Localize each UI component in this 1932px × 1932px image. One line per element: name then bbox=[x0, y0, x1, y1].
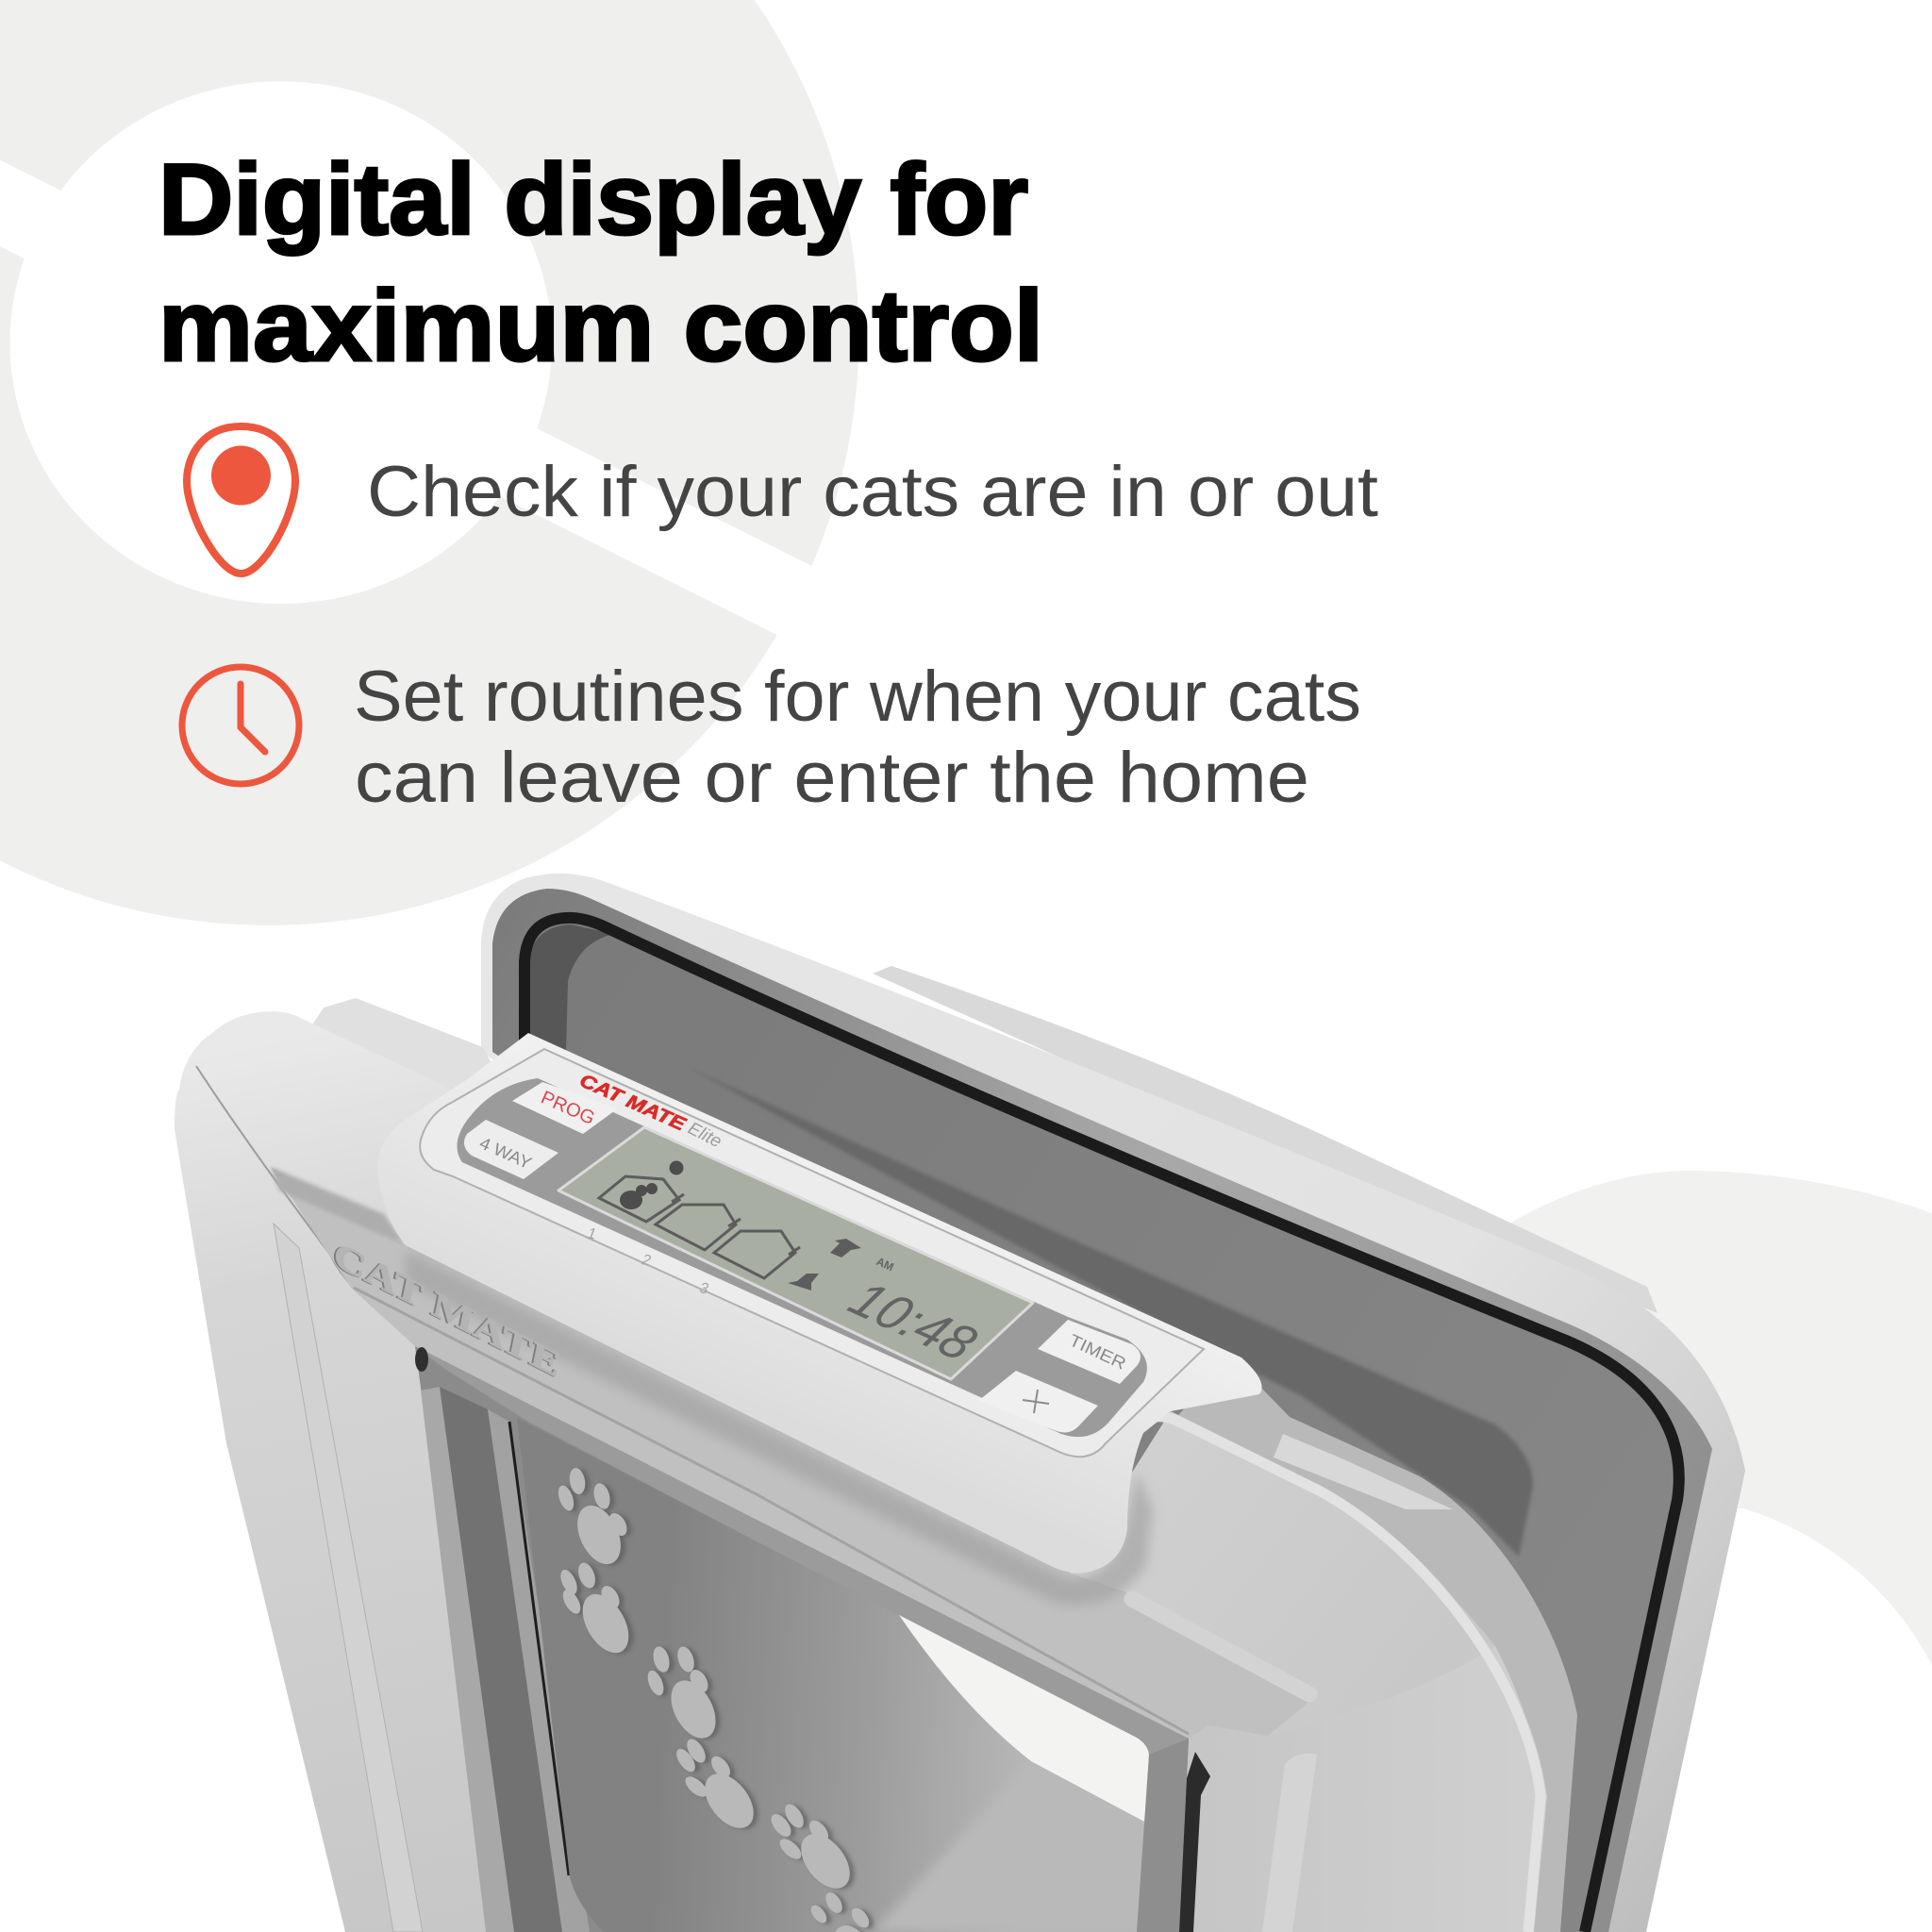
window recess bbox=[415, 1346, 1189, 1932]
lcd arrow up bbox=[830, 1239, 861, 1257]
plus glyph bbox=[1023, 1390, 1049, 1413]
window top lip bbox=[415, 1346, 1189, 1755]
embossed brand text bbox=[328, 1235, 564, 1386]
button plus bbox=[978, 1371, 1098, 1432]
frame shadow wedge bbox=[271, 1167, 406, 1245]
handle shadow bbox=[406, 1250, 1153, 1606]
rear frame rim bbox=[481, 874, 1745, 1932]
rear inner recess bbox=[686, 1066, 1533, 1557]
text: routines bbox=[354, 657, 1361, 818]
flap panel bbox=[517, 1418, 1146, 1932]
text: in or out: Check if your cats are in or out bbox=[367, 452, 1378, 532]
rear throat bbox=[1171, 1373, 1577, 1932]
frame top rib bbox=[1132, 1599, 1309, 1694]
display faceplate bbox=[420, 1049, 1204, 1457]
panel labels: PROG bbox=[538, 1087, 598, 1129]
embossed brand text: CAT MATE bbox=[330, 1235, 564, 1386]
panel labels bbox=[476, 1070, 1129, 1374]
rear left dark lip bbox=[528, 924, 613, 1052]
front frame bbox=[175, 1011, 1547, 1932]
button prog bbox=[512, 1082, 618, 1134]
window opening bbox=[899, 1615, 1149, 1823]
lcd icon: bell bbox=[670, 1160, 683, 1175]
title: maximum control bbox=[158, 269, 1043, 382]
window channel bbox=[440, 1387, 562, 1932]
frame lower right face bbox=[1179, 1646, 1547, 1932]
background logo shape: top left bbox=[0, 0, 937, 925]
product: cat flap bbox=[175, 874, 1745, 1932]
panel labels: TIMER bbox=[1066, 1330, 1129, 1374]
frame ridge line bbox=[354, 1288, 1189, 1734]
front frame right rim bbox=[1132, 1417, 1541, 1932]
lcd screen bbox=[558, 1127, 1033, 1379]
background logo shape: bottom right bbox=[1321, 1171, 1932, 1665]
rear black gasket bbox=[525, 918, 1679, 1932]
frame seam bbox=[196, 1066, 354, 1288]
lcd icon: cats bbox=[620, 1183, 658, 1209]
rear frame grey band bbox=[492, 889, 1712, 1932]
screw hole bbox=[415, 1347, 428, 1372]
paw prints bbox=[556, 1467, 873, 1932]
window right slit bbox=[1179, 1752, 1210, 1932]
display housing bbox=[377, 1033, 1262, 1574]
frame lower right rib bbox=[1262, 1754, 1317, 1932]
icon: clock bbox=[182, 667, 299, 784]
window rail 1 bbox=[421, 1387, 514, 1932]
embossed brand text: CAT MATE bbox=[328, 1235, 562, 1386]
front frame back tab bbox=[311, 998, 491, 1099]
lcd arrow down bbox=[788, 1274, 819, 1291]
rear throat highlight bbox=[1274, 1434, 1453, 1509]
frame right corner bbox=[943, 1411, 1495, 1736]
lcd text: AM bbox=[874, 1255, 896, 1274]
frame recess band bbox=[271, 1167, 1317, 1739]
panel labels: 4 WAY bbox=[476, 1133, 534, 1173]
text: routines: can leave or enter the home bbox=[355, 738, 1309, 818]
window right jamb bbox=[1137, 1739, 1189, 1932]
panel labels: 3 bbox=[698, 1280, 709, 1298]
button 4 way bbox=[464, 1120, 558, 1179]
button timer bbox=[1038, 1320, 1141, 1384]
icon: location pin bbox=[187, 426, 295, 574]
grey control surround bbox=[457, 1078, 1147, 1437]
flap lower light area bbox=[873, 1761, 1146, 1932]
window rail 2 bbox=[488, 1409, 590, 1932]
title: Digital display for bbox=[158, 142, 1028, 256]
title bbox=[158, 142, 1043, 382]
text: routines: Set routines for when your cats bbox=[354, 657, 1361, 737]
panel labels: CAT MATE bbox=[576, 1070, 689, 1136]
rear frame tab bbox=[873, 966, 1657, 1313]
rear inner panel bbox=[525, 918, 1679, 1932]
frame left rib bbox=[274, 1224, 423, 1932]
black slit bbox=[509, 1422, 569, 1875]
lcd text: 10:48 bbox=[839, 1272, 988, 1372]
panel labels: 1 bbox=[586, 1225, 597, 1242]
lcd icon: houses bbox=[599, 1176, 800, 1278]
panel labels: 2 bbox=[640, 1252, 652, 1270]
panel labels: Elite bbox=[685, 1119, 724, 1152]
